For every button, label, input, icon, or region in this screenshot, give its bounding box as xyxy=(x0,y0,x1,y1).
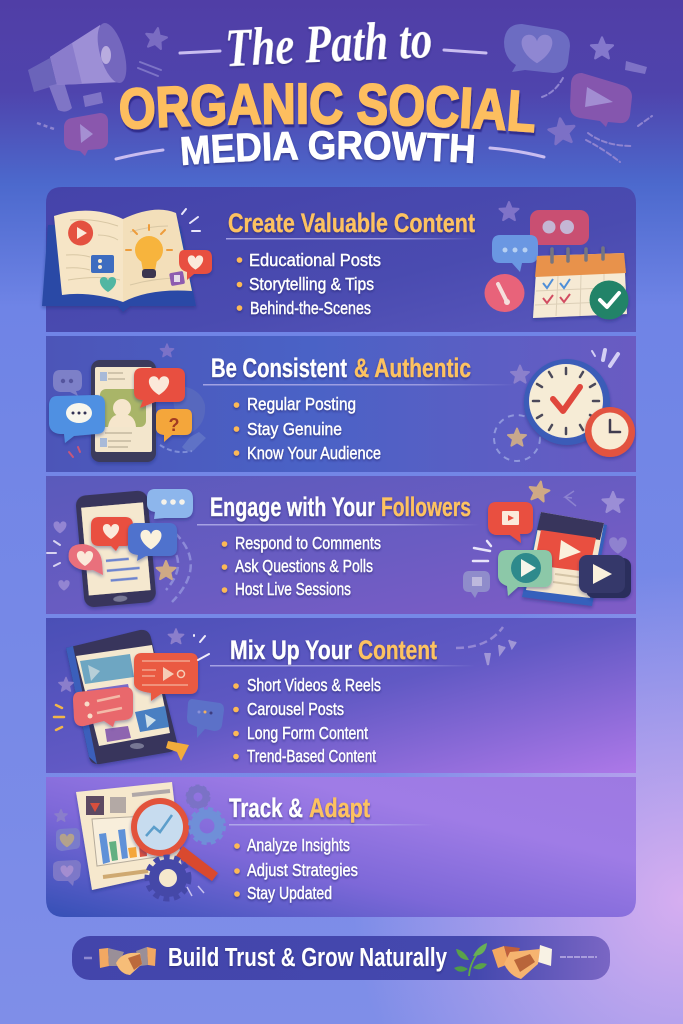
icon: small share lines xyxy=(565,491,576,506)
icon: stars and rays xyxy=(54,629,209,730)
icon: rays xyxy=(473,541,491,561)
bullet list: Stay Genuine xyxy=(247,419,342,439)
heading: Be Consistent xyxy=(211,353,347,383)
icon: blue bubble xyxy=(187,699,224,738)
icon: phone with profile xyxy=(91,360,156,462)
bullet list xyxy=(234,394,381,463)
icon: dots xyxy=(37,123,54,129)
icon: faint bubble behind xyxy=(170,385,205,437)
icon: magnifying glass xyxy=(131,798,218,881)
icon: dashed arcs xyxy=(166,533,191,602)
icon: dark video tile xyxy=(579,555,631,598)
icon: video bubble left xyxy=(64,113,108,156)
heading: Mix Up Your xyxy=(230,635,352,665)
heading: Content xyxy=(358,635,437,665)
icon: purple heart xyxy=(609,537,627,554)
bullet list: Storytelling & Tips xyxy=(249,274,374,294)
underline xyxy=(226,238,476,240)
title: The Path to: The Path to xyxy=(224,9,433,78)
panel: create valuable content xyxy=(42,187,636,332)
icon: clock with check xyxy=(524,359,610,445)
heading xyxy=(229,793,370,823)
decorative red ticks xyxy=(69,447,80,457)
bullet list: Know Your Audience xyxy=(247,443,381,463)
icon: red video bubble xyxy=(134,653,198,701)
bullet list xyxy=(233,675,381,766)
icon: red speech bubble xyxy=(530,210,589,245)
icon: tag right xyxy=(625,61,647,74)
panel: engage with your followers xyxy=(46,476,636,614)
icon: faint rays xyxy=(187,886,204,896)
underline xyxy=(197,524,480,526)
icon: gray bubble xyxy=(53,370,82,396)
icon: phone with video cards xyxy=(66,630,177,764)
bullet list xyxy=(234,835,358,903)
icon: small red clock xyxy=(585,407,635,457)
heading: Followers xyxy=(381,492,471,522)
title xyxy=(120,9,536,168)
icon: question bubble: ? xyxy=(168,415,180,435)
bullet list: Short Videos & Reels xyxy=(247,675,381,695)
icon: blue chat bubble xyxy=(49,395,105,443)
icon: small star xyxy=(55,810,67,821)
bullet list: Trend-Based Content xyxy=(247,746,376,766)
underline xyxy=(229,824,434,826)
bullet list xyxy=(222,533,381,599)
icon: right phone xyxy=(522,512,607,606)
icon: orange arrow xyxy=(166,741,189,761)
bullet list: Host Live Sessions xyxy=(235,579,351,599)
decorative title rules xyxy=(116,50,544,159)
title: Media Growth: MEDIA GROWTH xyxy=(180,130,476,168)
bullet list: Long Form Content xyxy=(247,723,368,743)
icon: pink list bubble xyxy=(73,687,133,727)
heading: & Authentic xyxy=(354,353,471,383)
panel: mix up your content xyxy=(46,618,636,773)
bullet list xyxy=(237,250,381,318)
icon: blue dots bubble xyxy=(147,489,193,519)
icon: gears xyxy=(147,786,224,899)
icon: red heart bubble xyxy=(91,517,133,551)
icon: pink heart bubble xyxy=(69,544,103,575)
icon: star xyxy=(500,202,518,220)
heading: Track & xyxy=(229,793,303,823)
slogan: Build Trust & Grow Naturally xyxy=(168,944,448,972)
icon: phone xyxy=(75,490,157,608)
heading: Adapt xyxy=(309,793,370,823)
decoration: dashes and rays xyxy=(456,627,516,665)
icon: handshake left xyxy=(99,947,156,975)
icon: star left xyxy=(144,26,168,50)
icon: tan star xyxy=(528,480,551,502)
icon: red video bubble xyxy=(488,502,533,543)
underline xyxy=(203,384,516,386)
underline xyxy=(210,665,475,666)
icon: tan star xyxy=(156,561,176,579)
icon: clock rays xyxy=(592,350,618,366)
icon: heart bubble xyxy=(134,368,185,408)
icon: stars and dashed circle xyxy=(494,366,540,461)
decorative dashes xyxy=(84,957,92,959)
heading xyxy=(211,353,471,383)
bullet list: Stay Updated xyxy=(247,883,332,903)
bullet list: Educational Posts xyxy=(249,250,381,270)
heading: Engage with Your xyxy=(210,492,375,522)
icon: gray bubble xyxy=(463,571,490,598)
icon: heart bubble xyxy=(504,24,570,73)
icon: star xyxy=(160,344,174,357)
icon: handshake right xyxy=(492,945,552,979)
icon: small tag xyxy=(83,92,103,107)
footer banner xyxy=(72,936,610,980)
bullet list: Analyze Insights xyxy=(247,835,350,855)
bullet list: Regular Posting xyxy=(247,394,356,414)
icon: leaf sprig xyxy=(454,943,487,976)
icon: sparkle rays xyxy=(182,209,200,231)
icon: pink clock xyxy=(484,274,524,312)
icon: purple star xyxy=(603,492,623,512)
icon: video bubble right xyxy=(570,73,632,127)
icon: blue heart bubble xyxy=(128,523,177,561)
panel: be consistent and authentic xyxy=(46,336,636,472)
icon: calendar xyxy=(533,248,628,320)
icon: report document xyxy=(76,782,182,890)
bullet list: Carousel Posts xyxy=(247,699,344,719)
icon: megaphone xyxy=(28,20,132,112)
icon: small lines xyxy=(138,62,161,76)
icon: open book xyxy=(42,210,212,312)
icon: dashes right xyxy=(542,76,652,162)
icon: star bottom right xyxy=(547,117,576,145)
heading: Create Valuable Content xyxy=(228,208,475,238)
icon: small hearts and rays xyxy=(47,521,70,591)
header xyxy=(28,9,653,168)
icon: question bubble xyxy=(156,409,192,442)
bullet list: Adjust Strategies xyxy=(247,860,358,880)
icon: blue speech bubble xyxy=(492,235,538,272)
bullet list: Behind-the-Scenes xyxy=(250,298,371,318)
panel: track and adapt xyxy=(46,777,636,917)
title: Organic Social: ORGANIC SOCIAL xyxy=(120,82,536,136)
bullet list: Ask Questions & Polls xyxy=(235,556,373,576)
icon: green video bubble xyxy=(498,550,552,596)
bullet list: Respond to Comments xyxy=(235,533,381,553)
icon: star right top xyxy=(591,38,613,58)
icon: heart bubbles xyxy=(53,828,81,886)
